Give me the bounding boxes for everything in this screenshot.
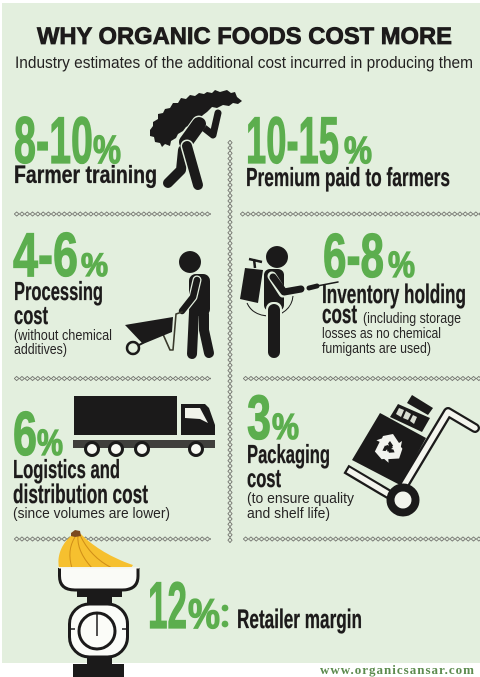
note: to ensure quality and shelf life: and shelf life) <box>247 505 330 522</box>
note: without chemical additives <box>14 327 112 358</box>
label: packaging cost: Packaging <box>247 439 330 469</box>
icon: worker with backpack sprayer <box>240 246 338 360</box>
panel: farmer training <box>14 90 242 189</box>
label: farmer training: Farmer training <box>14 161 157 189</box>
percentage: 10-15%: 10-15 <box>246 103 339 177</box>
note: including storage losses <box>322 310 461 357</box>
panel: packaging cost <box>247 384 475 522</box>
panel: premium paid to farmers <box>246 103 450 192</box>
panel: retailer margin <box>58 530 362 677</box>
icon: weighing scale <box>59 567 139 677</box>
percentage: 6%: 6 <box>13 400 37 469</box>
panel: logistics and distribution cost <box>13 396 215 522</box>
note: without chemical additives: (without chemical <box>14 327 112 344</box>
icon: farmer carrying crop bundle <box>150 90 242 185</box>
percentage: 8-10%: 8-10 <box>14 103 93 177</box>
percentage: 3%: 3 <box>247 384 271 453</box>
label: inventory holding cost: cost <box>322 299 357 329</box>
percentage: 4-6%: % <box>81 247 108 283</box>
note: including storage losses: losses as no chemical <box>322 325 441 342</box>
label: processing cost: Processing <box>14 276 103 306</box>
percentage: 3%: % <box>272 406 299 447</box>
note: including storage losses: (including storage <box>363 310 461 327</box>
label: processing cost: cost <box>14 300 48 330</box>
percentage: 6-8%: 6-8 <box>323 222 384 291</box>
note: to ensure quality and shelf life: (to ensure quality <box>247 490 354 507</box>
title: WHY ORGANIC FOODS COST MORE <box>37 23 452 50</box>
label: logistics and distribution cost: Logistics and <box>13 454 120 484</box>
percentage: 10-15%: % <box>344 130 372 172</box>
label: packaging cost <box>247 439 330 493</box>
label: packaging cost: cost <box>247 463 281 493</box>
label: retailer margin: Retailer margin <box>237 604 362 634</box>
website url: www.organicsansar.com <box>320 662 474 677</box>
percentage: 8-10%: % <box>93 128 121 172</box>
label: logistics and distribution cost <box>13 454 148 509</box>
percentage: 6-8%: % <box>388 244 415 285</box>
icon: hand truck with recycled boxes <box>346 395 475 512</box>
percentage: 4-6%: 4-6 <box>13 221 78 290</box>
icon: worker with wheelbarrow <box>125 251 210 354</box>
icon: delivery truck <box>73 396 215 456</box>
percentage: 6%: % <box>37 422 63 463</box>
label: inventory holding cost <box>322 279 466 329</box>
label: logistics and distribution cost: distribution cost <box>13 479 148 509</box>
percentage: 6% <box>13 400 63 469</box>
percentage: 3% <box>247 384 299 453</box>
note: without chemical additives: additives) <box>14 341 67 358</box>
label: processing cost <box>14 276 103 330</box>
panel: processing cost <box>13 221 210 358</box>
icon: recycling symbol <box>370 434 406 466</box>
note: including storage losses: fumigants are used) <box>322 340 431 357</box>
dividers <box>14 140 480 543</box>
percentage: 12%: 12 <box>148 568 187 642</box>
icon: bananas <box>58 530 133 568</box>
percentage: 12%: % <box>188 590 220 637</box>
panel: inventory holding cost <box>240 222 466 360</box>
note: since volumes are lower: (since volumes are lower) <box>13 505 170 522</box>
note: to ensure quality and shelf life <box>247 490 354 522</box>
